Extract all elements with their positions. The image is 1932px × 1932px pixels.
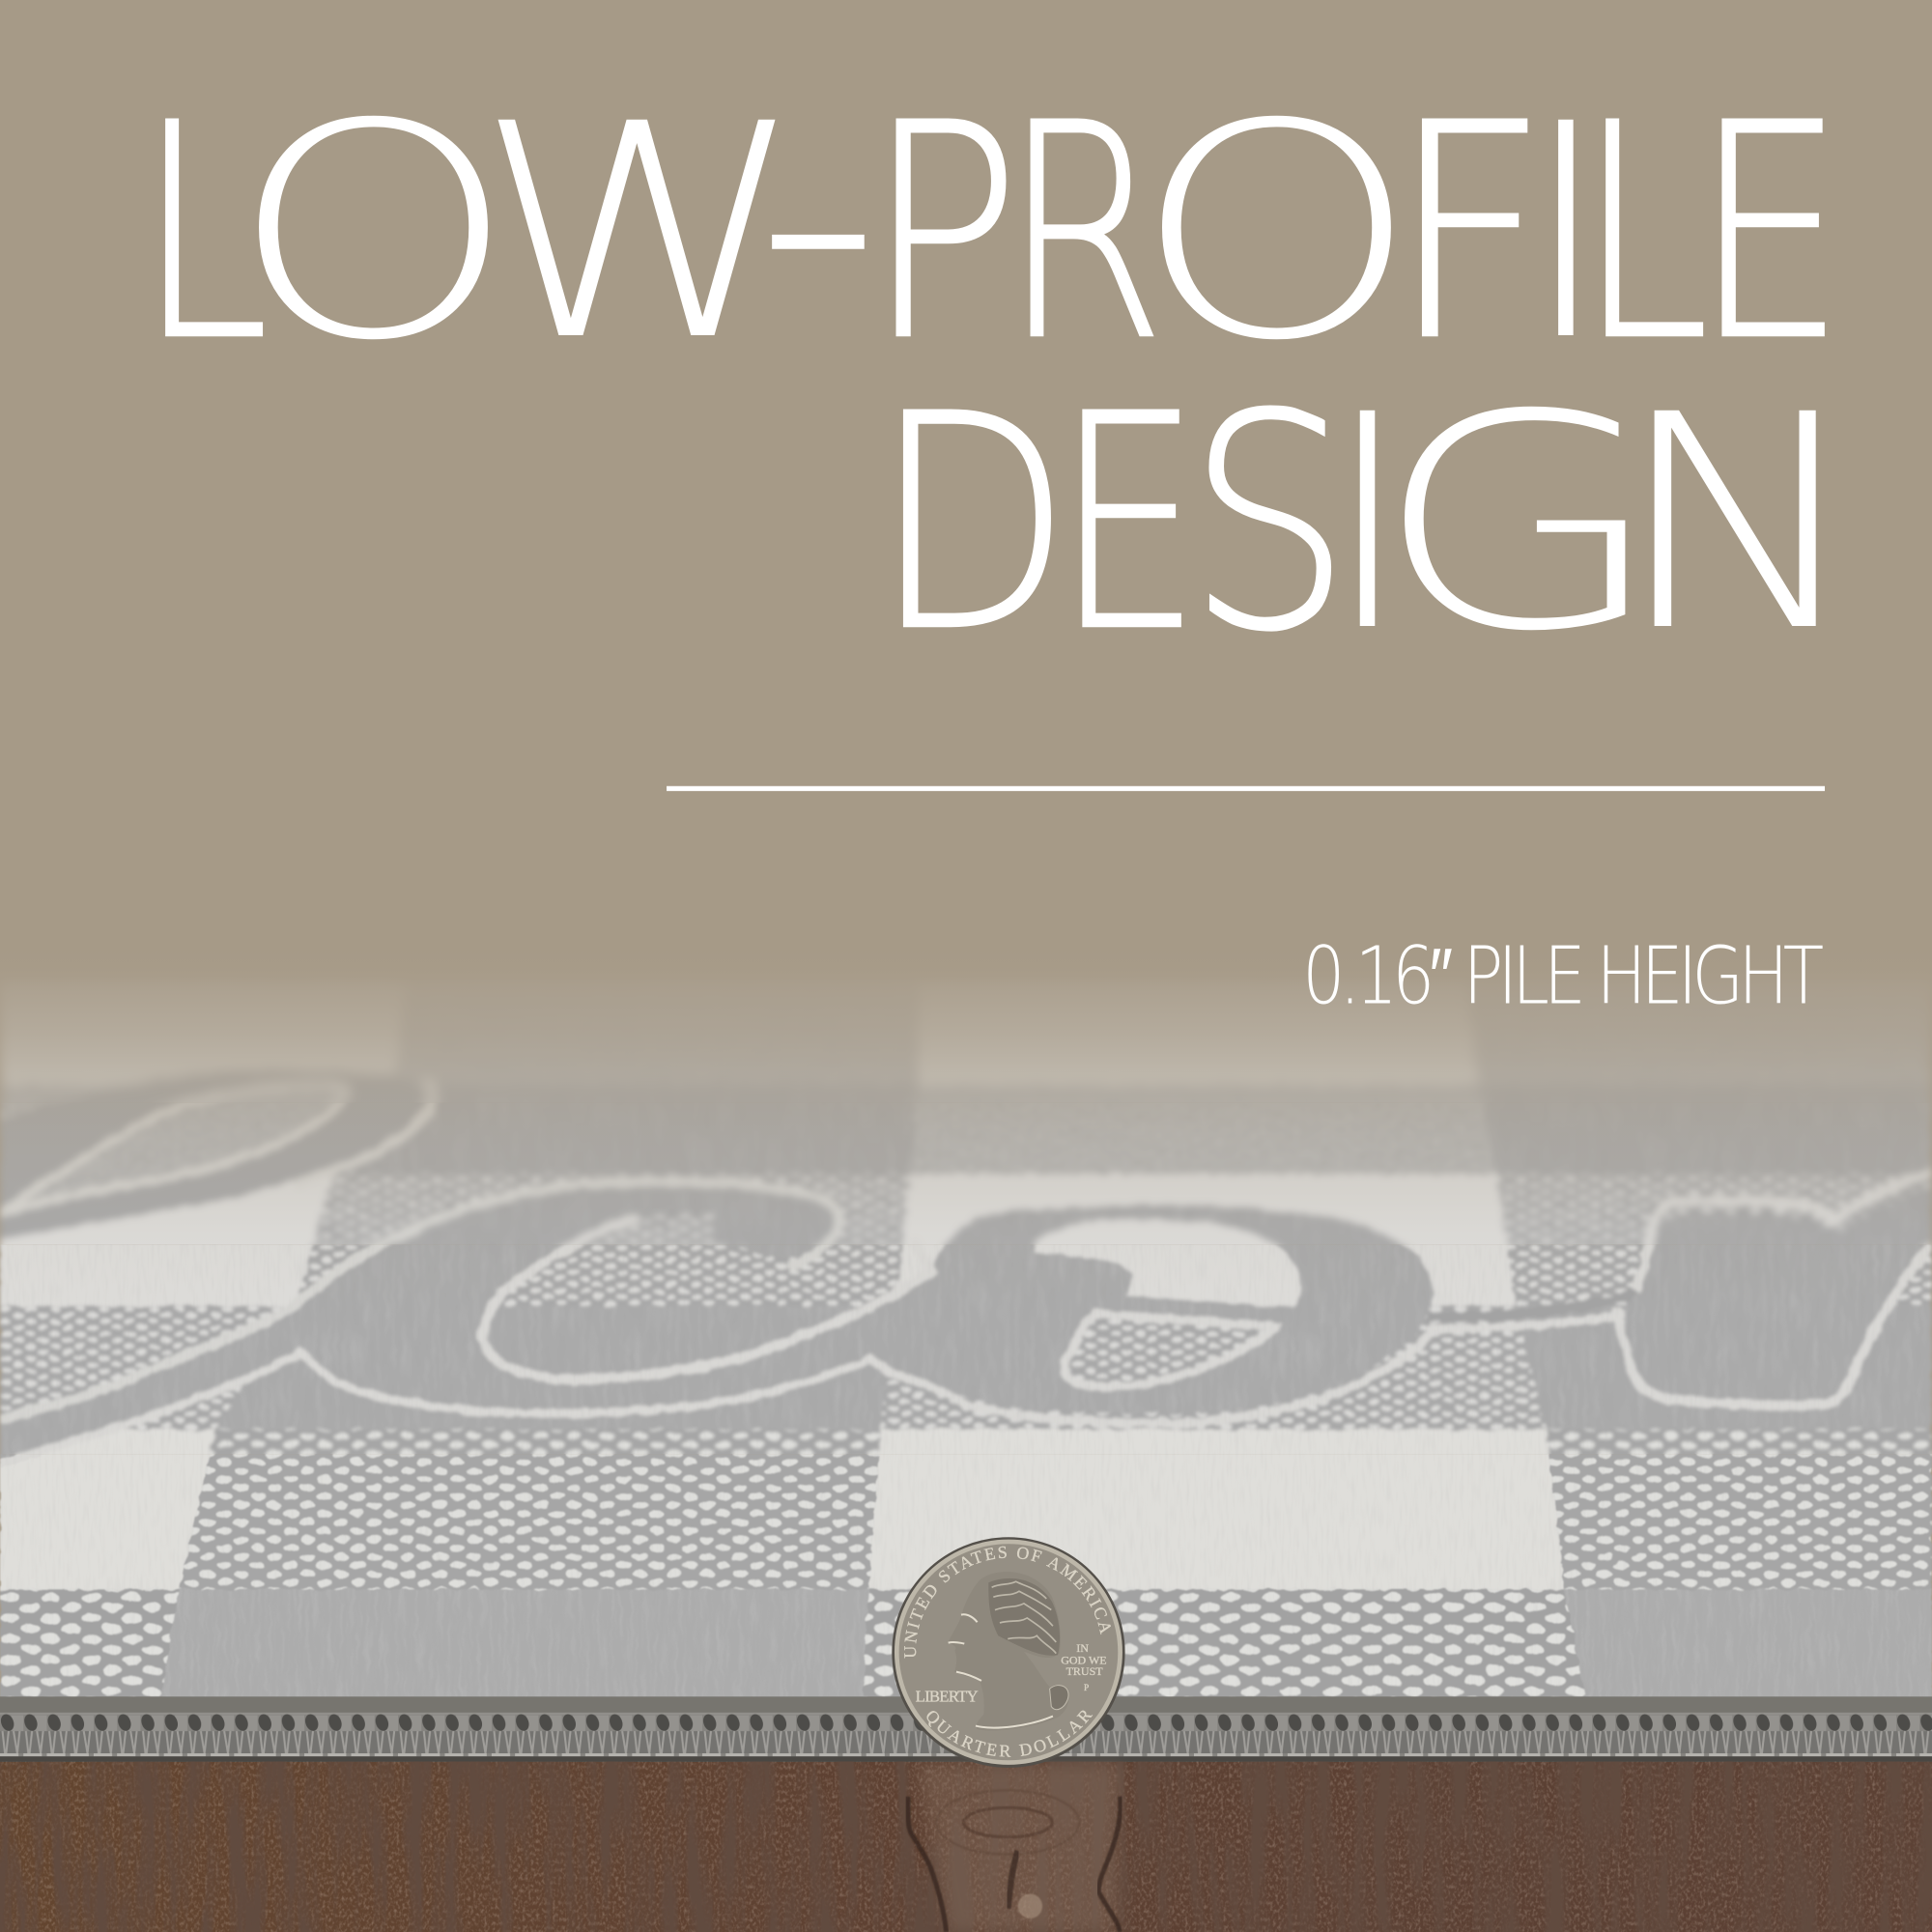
title line 1: F: [1389, 62, 1549, 406]
rug edge: serged binding: [0, 1696, 1932, 1762]
title line 2: I: [1324, 353, 1411, 696]
wood floor: [0, 1762, 1932, 1932]
icon: quarter dollar coin for scale: [892, 1537, 1125, 1768]
title line 1: [137, 48, 1845, 406]
coin lettering: UNITED STATES OF AMERICA: [904, 1546, 1111, 1658]
title line 1: I: [1522, 62, 1609, 406]
title line 2: [873, 351, 1867, 696]
title line 1: O: [1132, 62, 1421, 406]
title: LOW-PROFILE DESIGN: [137, 48, 1867, 696]
title line 1: L: [1577, 62, 1710, 406]
coin lettering: IN: [1076, 1641, 1089, 1655]
title line 2: D: [873, 351, 1071, 696]
title line 1: E: [1693, 60, 1845, 405]
Washington bust: [949, 1572, 1068, 1730]
title line 1: L: [137, 62, 270, 406]
title line 2: E: [1055, 352, 1201, 696]
coin lettering: GOD WE: [1061, 1654, 1107, 1667]
title line 1: P: [866, 61, 1021, 405]
divider rule: [667, 786, 1825, 791]
coin lettering: LIBERTY: [916, 1688, 979, 1706]
title line 1: -: [756, 48, 879, 393]
title line 1: W: [474, 62, 807, 406]
title line 1: R: [1003, 62, 1165, 406]
subtitle: pile height: 0.16″ PILE HEIGHT: [1302, 930, 1824, 1022]
title line 2: N: [1613, 352, 1867, 696]
title line 2: G: [1373, 351, 1665, 696]
rug: grey buffalo check with script lettering: [0, 949, 1932, 1719]
coin lettering: TRUST: [1066, 1664, 1103, 1678]
coin lettering: [904, 1546, 1111, 1757]
coin lettering: QUARTER DOLLAR: [927, 1710, 1094, 1757]
coin lettering: P: [1084, 1684, 1089, 1693]
title line 1: O: [229, 62, 518, 406]
title line 2: S: [1187, 352, 1351, 696]
